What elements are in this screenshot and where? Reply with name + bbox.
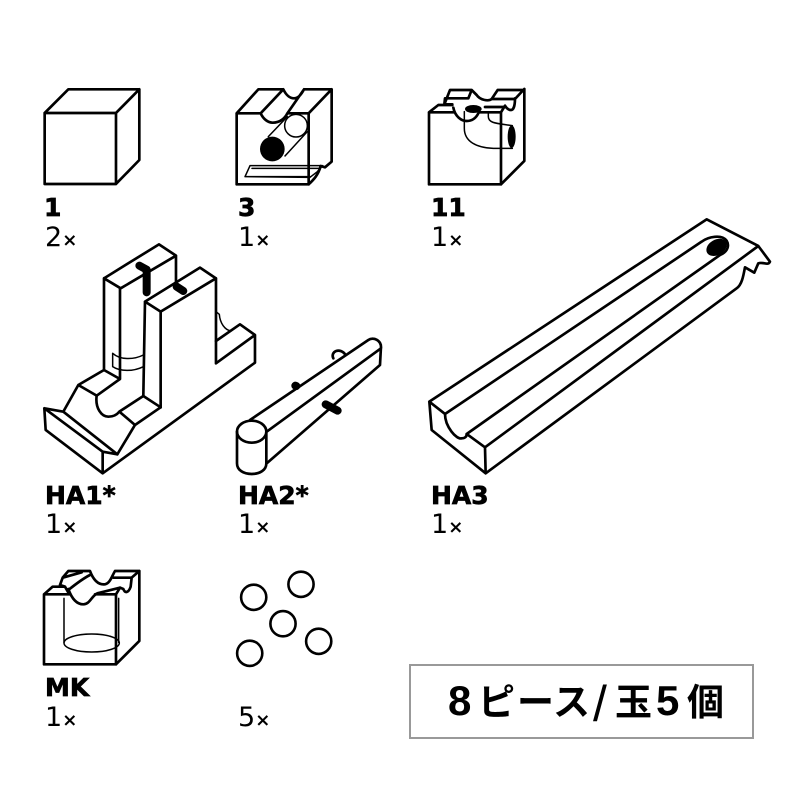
label: MK: MK (45, 673, 91, 702)
count: balls: 5× (238, 702, 270, 733)
label: piece 11: 11 (431, 193, 466, 222)
callout text: ー (517, 682, 554, 723)
label: piece 3: 3 (238, 193, 255, 222)
label: HA1: HA1* (45, 481, 116, 510)
shaft lines (64, 598, 119, 642)
hole: black ball (703, 235, 730, 259)
count: HA2: 1× (238, 509, 270, 540)
black pins (295, 386, 338, 411)
count: piece 1: 2× (45, 222, 77, 253)
hole: black top opening (465, 105, 482, 113)
callout text: 個 (687, 682, 724, 723)
count: HA1: 1× (45, 509, 77, 540)
count: piece 11: 1× (431, 222, 463, 253)
icon: piece 3 cube with groove (237, 89, 332, 184)
black pins (139, 266, 183, 292)
icon: piece 11 cube with curved tunnel (429, 89, 524, 184)
icon: piece MK cube with vertical shaft (44, 571, 139, 664)
icon: piece 1 cube (45, 89, 139, 184)
label: HA3: HA3 (431, 481, 489, 510)
callout text: 玉 (615, 682, 652, 723)
shaft bottom ellipse (64, 634, 119, 652)
hole: black entry (260, 137, 285, 161)
count: MK: 1× (45, 702, 77, 733)
callout text: ス (553, 682, 590, 723)
icon: piece HA2 (237, 339, 381, 474)
count: HA3: 1× (431, 509, 463, 540)
callout text: ピ (478, 682, 515, 723)
label: HA2: HA2* (238, 481, 309, 510)
callout text: 8 (448, 677, 471, 724)
tunnel lines (464, 112, 512, 148)
icon: five balls (237, 572, 331, 666)
callout text: / (593, 676, 607, 732)
hole: black side opening (508, 125, 516, 148)
callout: total box (410, 665, 753, 738)
label: piece 1: 1 (44, 193, 61, 222)
icon: piece HA3 long rail (429, 219, 770, 473)
icon: piece HA1 (44, 244, 255, 473)
hole: white exit (285, 114, 307, 137)
count: piece 3: 1× (238, 222, 270, 253)
callout text: 5 (656, 677, 679, 724)
